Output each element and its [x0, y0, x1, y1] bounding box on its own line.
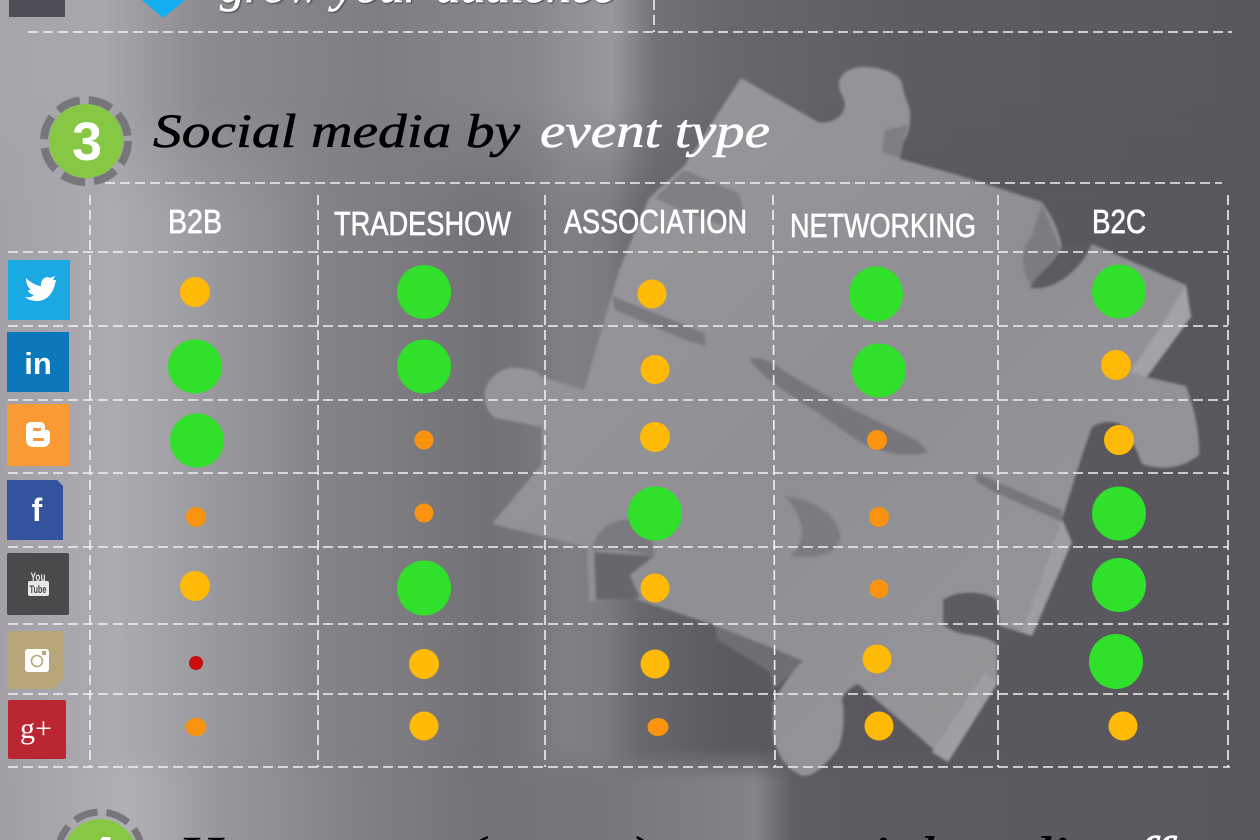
- column headers: ASSOCIATION: [564, 203, 747, 240]
- puzzle: notch lower right: [943, 592, 1000, 648]
- puzzle: curtain shadow upper left: [655, 170, 744, 228]
- section 4 number badge: [58, 812, 142, 840]
- icon: facebook: f: [32, 492, 43, 528]
- puzzle: notch lower left: [592, 520, 654, 556]
- puzzle: seam shadow right: [975, 473, 1062, 522]
- dots row: twitter: [180, 264, 1146, 322]
- puzzle: seam shadow upper: [612, 296, 706, 346]
- icon: instagram: [7, 631, 63, 689]
- section 4 heading: [177, 827, 1242, 840]
- section 3 heading: Social media by: [153, 105, 521, 158]
- puzzle: notch lower left dark: [594, 552, 654, 600]
- puzzle: notch middle: [785, 497, 840, 557]
- previous section: blue arrow icon: [142, 0, 185, 18]
- section 3 heading: event type: [540, 105, 770, 158]
- puzzle: right 3D edge: [1022, 519, 1072, 636]
- icon: facebook: [7, 480, 63, 540]
- section 3 heading: [153, 105, 770, 158]
- puzzle: top tab shade: [882, 125, 908, 158]
- icon: youtube: Tube: [30, 584, 46, 596]
- icon: youtube: You: [30, 570, 46, 584]
- puzzle: lower seam: [714, 625, 803, 690]
- puzzle: dark hole top right: [1030, 242, 1093, 288]
- section 3 number badge: [44, 100, 128, 182]
- dots row: facebook: [186, 486, 1146, 540]
- column headers: [168, 203, 1146, 244]
- dots row: instagram: [189, 634, 1143, 689]
- puzzle: hole ring shading: [1023, 204, 1060, 286]
- icon: twitter: [8, 260, 70, 320]
- previous section: marker square: [9, 0, 65, 17]
- icon: youtube: [7, 553, 69, 615]
- column headers: B2B: [168, 203, 222, 240]
- dots row: youtube: [180, 558, 1146, 616]
- column headers: TRADESHOW: [334, 205, 512, 242]
- puzzle: seam shadow centre: [751, 358, 928, 455]
- icon: google plus: g+: [20, 712, 52, 745]
- column headers: B2C: [1092, 203, 1146, 240]
- icon: linkedin: in: [24, 346, 52, 381]
- puzzle pieces illustration: [485, 67, 1199, 776]
- dots row: google plus: [186, 712, 1138, 740]
- icon: google plus: [8, 700, 66, 759]
- icon: linkedin: [7, 332, 69, 392]
- puzzle: lower 3D edge: [932, 672, 997, 762]
- dots row: blogger: [170, 414, 1134, 468]
- previous section: table bottom rule: [28, 0, 1232, 32]
- icon: blogger: [7, 404, 69, 466]
- column headers: NETWORKING: [790, 207, 976, 244]
- puzzle: far right 3D edge: [1130, 285, 1191, 377]
- table grid: [8, 183, 1230, 767]
- section 3 number badge: 3: [72, 112, 102, 172]
- dots row: linkedin: [168, 340, 1131, 398]
